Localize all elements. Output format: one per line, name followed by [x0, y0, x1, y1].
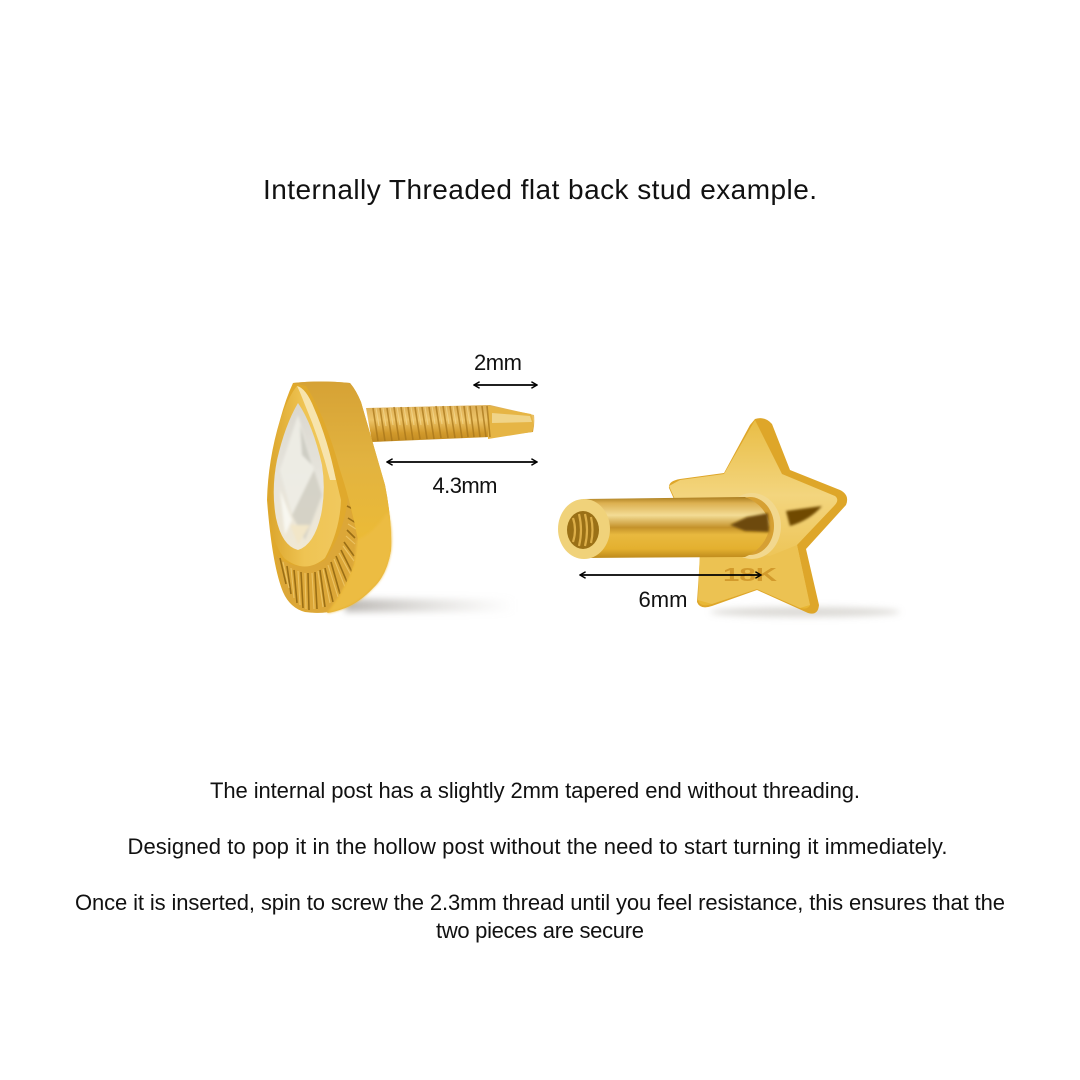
engraved sunburst base — [275, 497, 358, 613]
description text: two pieces are secure — [436, 918, 644, 943]
inner bezel — [268, 386, 341, 566]
threaded hole — [567, 511, 599, 549]
measure: 6mm: 6mm — [638, 587, 688, 612]
collar ring — [723, 493, 781, 559]
hallmark: 18K — [723, 565, 777, 585]
band lower highlight — [327, 512, 392, 613]
collar inner — [726, 497, 774, 555]
description text — [75, 778, 1005, 943]
tube reflection — [730, 513, 769, 532]
pale bevel — [297, 386, 336, 480]
title: Internally Threaded flat back stud example. — [263, 174, 817, 205]
measure: 4.3mm: 4.3mm — [432, 473, 498, 498]
tube post — [583, 497, 770, 558]
teardrop stud — [267, 382, 534, 613]
star stud — [558, 418, 900, 617]
shadow: star stud — [710, 607, 900, 617]
measure: 2mm — [474, 350, 537, 385]
description text: Designed to pop it in the hollow post without the need to start turning it immediately. — [128, 834, 948, 859]
threaded post — [366, 405, 534, 442]
description text: Once it is inserted, spin to screw the 2.3mm thread until you feel resistance, this ensures that the — [75, 890, 1005, 915]
star dark reflection — [786, 506, 822, 526]
star lower face — [698, 545, 810, 608]
pear stone — [274, 403, 324, 550]
description text: The internal post has a slightly 2mm tapered end without threading. — [210, 778, 860, 803]
star face — [669, 420, 837, 609]
tube end — [558, 499, 610, 559]
shadow: teardrop stud — [345, 599, 515, 612]
star side edge — [669, 418, 847, 614]
polished front band — [293, 382, 391, 613]
measure: 2mm: 2mm — [474, 350, 522, 375]
outer silhouette — [267, 382, 391, 613]
